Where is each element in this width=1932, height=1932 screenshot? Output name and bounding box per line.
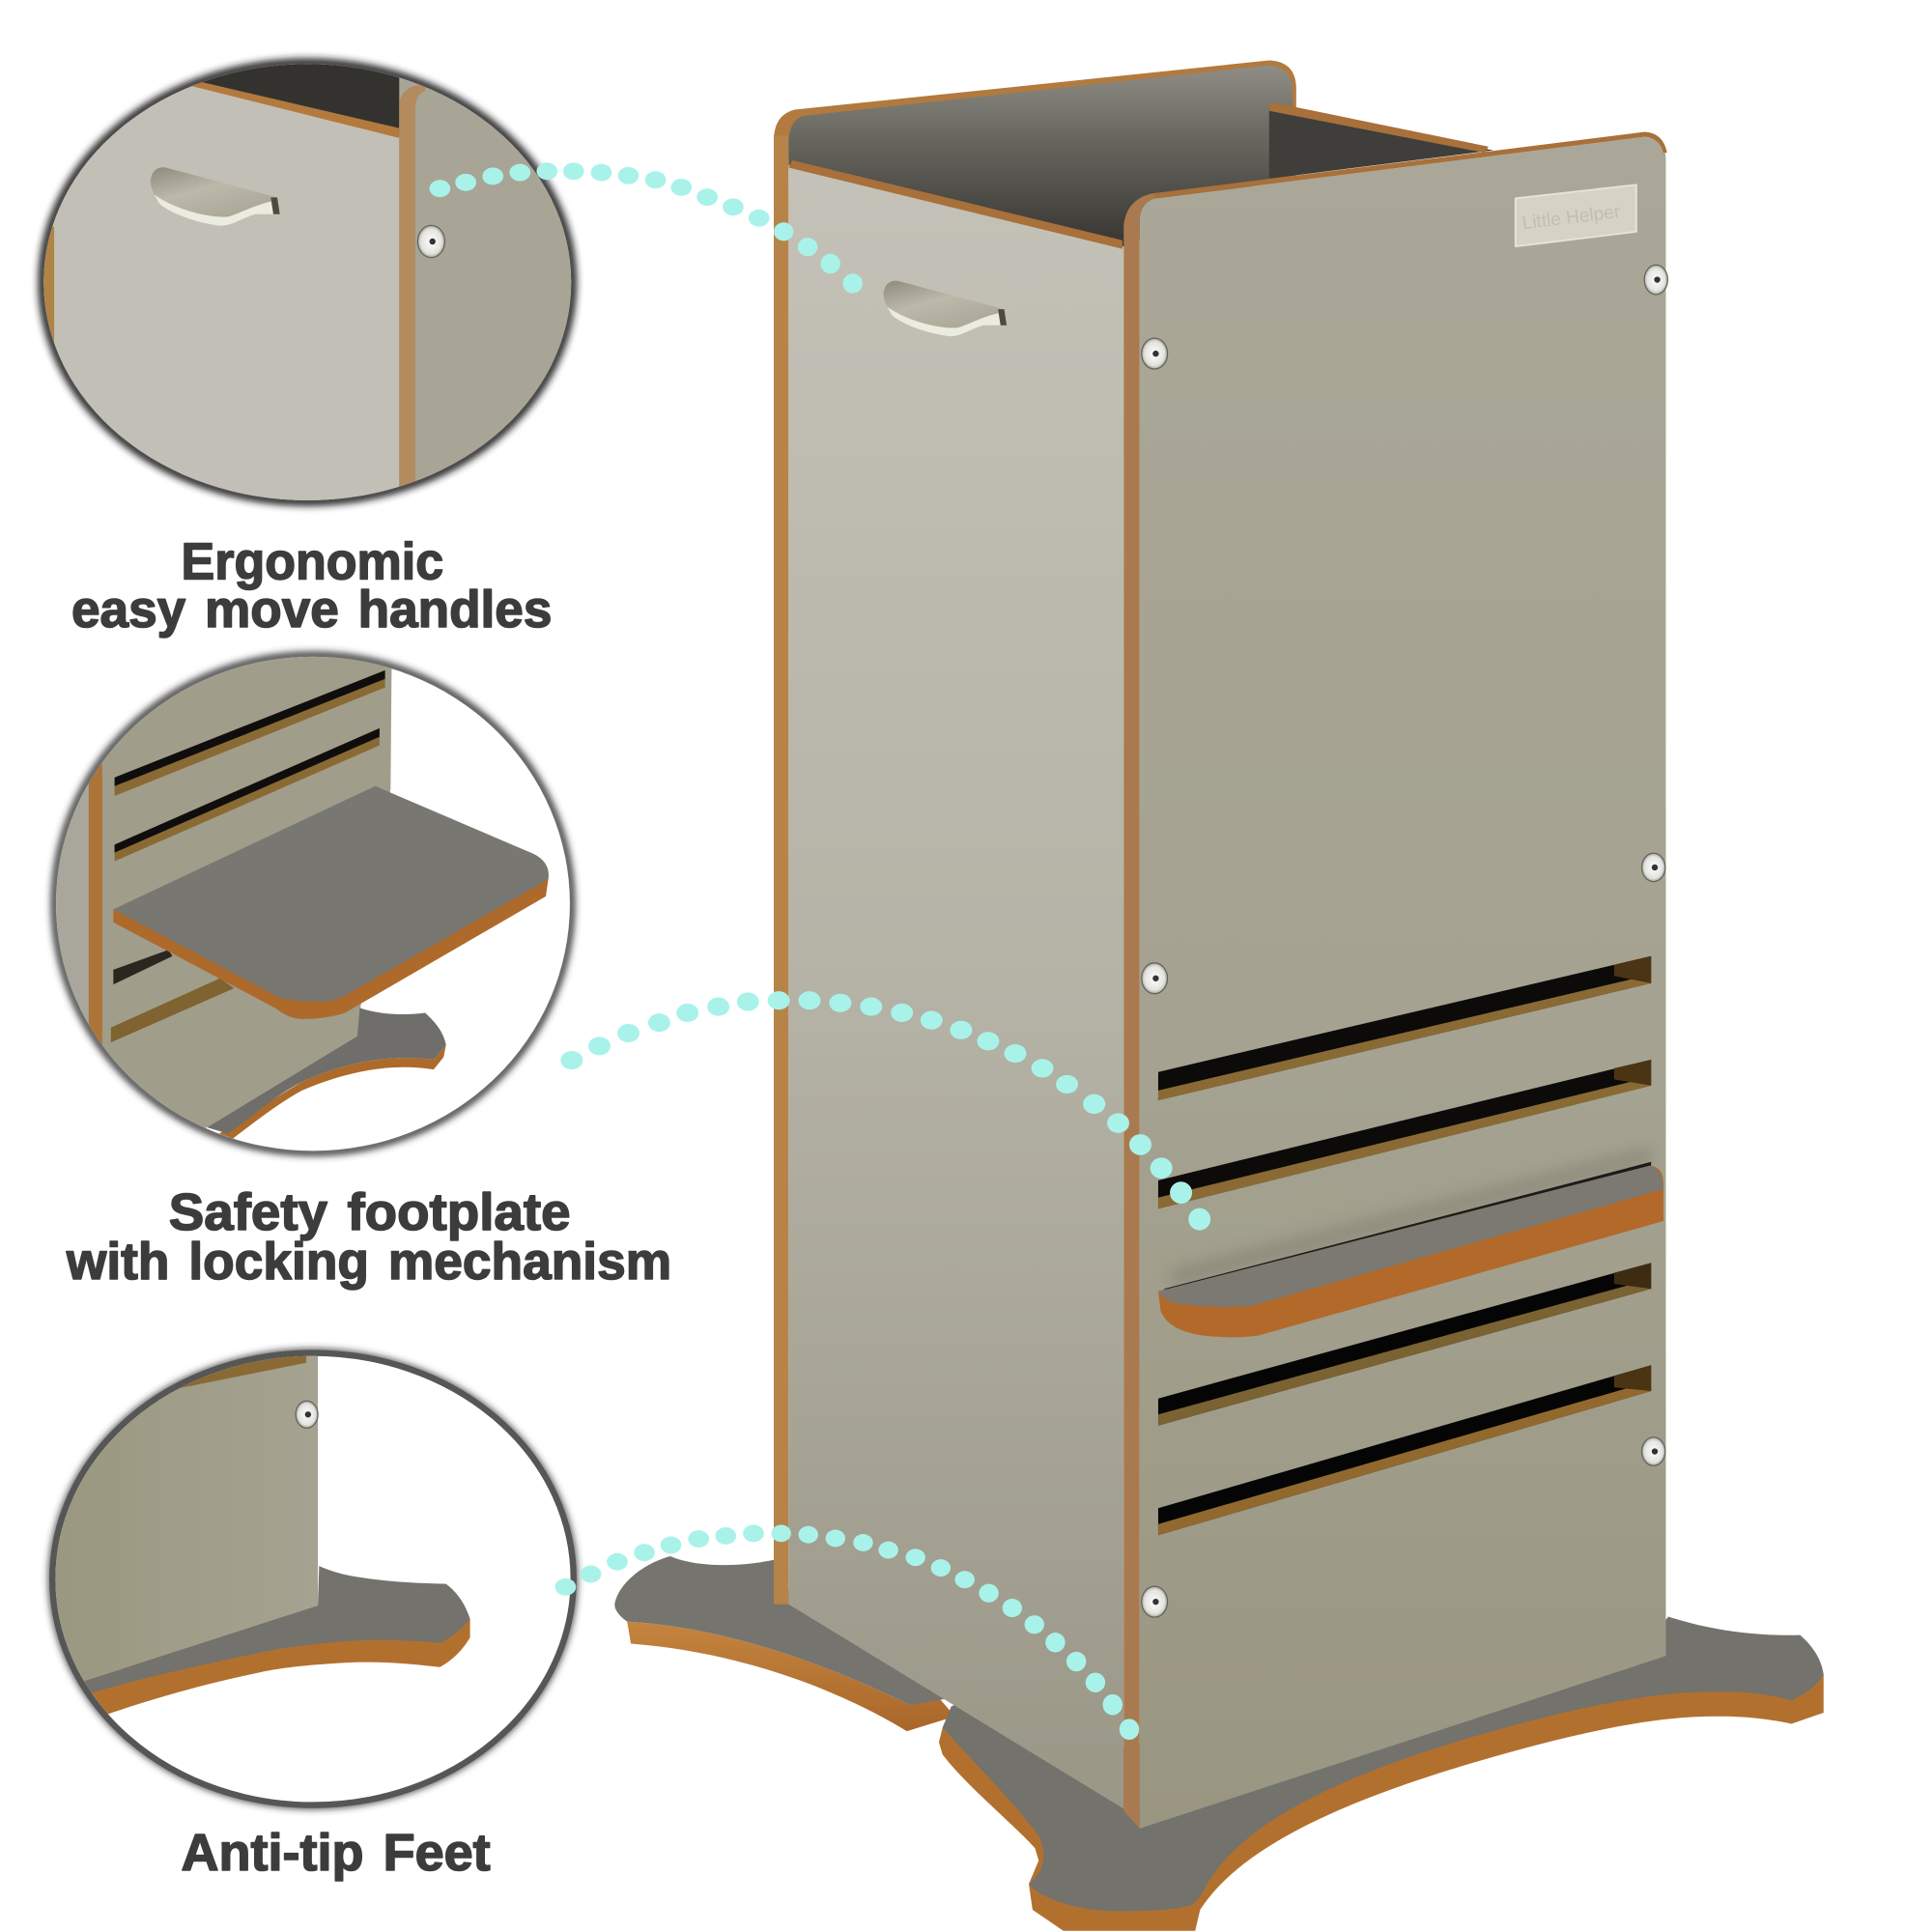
left panel brown edge	[774, 135, 788, 1605]
screw close-up	[417, 225, 444, 258]
heading: footplate: Safety footplate	[169, 1184, 571, 1241]
slot 1	[1158, 956, 1651, 1100]
screw close-up	[296, 1401, 318, 1428]
heading: footplate	[66, 1184, 671, 1291]
left rear foot	[614, 1556, 974, 1731]
slot 2	[1158, 1060, 1651, 1208]
footplate shadow	[1171, 1146, 1651, 1289]
slot 3	[1158, 1263, 1651, 1426]
heading: feet: Anti-tip Feet	[182, 1825, 491, 1882]
footplate	[1158, 1162, 1663, 1337]
slot 4	[1158, 1365, 1651, 1535]
inner side panel	[1269, 108, 1493, 179]
screws	[1142, 265, 1667, 1617]
heading: handles: Ergonomic	[182, 533, 443, 590]
left panel	[788, 165, 1123, 1808]
handle	[884, 281, 1007, 336]
brand plate: Little Helper	[1521, 202, 1622, 234]
heading: handles	[71, 533, 552, 639]
right panel	[1140, 137, 1665, 1829]
brand plate	[1516, 185, 1636, 246]
corner brown edge	[1123, 192, 1164, 1829]
panel: handle detail circle	[37, 49, 579, 518]
right panel top edge	[1152, 131, 1667, 198]
panel: footplate detail circle	[49, 640, 571, 1158]
arrow: dotted footplate connector	[560, 991, 1210, 1231]
right and front foot	[939, 1616, 1824, 1931]
plate close-up	[113, 879, 549, 1019]
foot close-up	[74, 1619, 470, 1717]
left panel top edge	[788, 160, 1122, 249]
handle close-up	[151, 167, 280, 226]
heading: footplate: with locking mechanism	[66, 1234, 671, 1291]
heading: handles: easy move handles	[71, 582, 552, 639]
product: kitchen tower	[614, 60, 1824, 1931]
foot close-up	[219, 1045, 446, 1139]
panel: feet detail circle	[37, 1343, 574, 1805]
arrow: dotted handle connector	[430, 162, 863, 294]
back panel interior	[774, 60, 1296, 246]
arrow: dotted feet connector	[555, 1524, 1139, 1740]
